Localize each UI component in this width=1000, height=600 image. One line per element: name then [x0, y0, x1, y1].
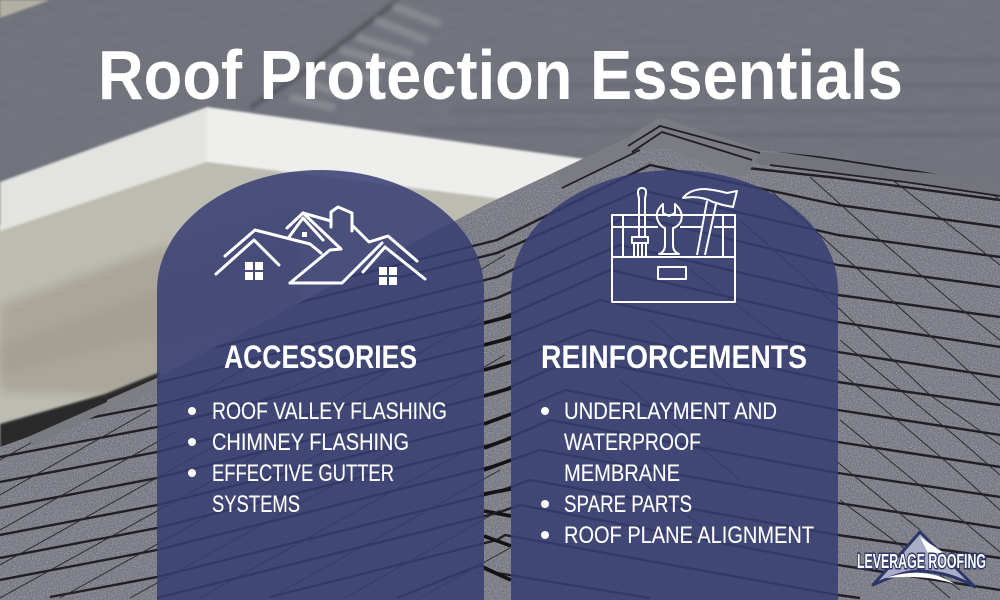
ridge cap shingles [555, 117, 1000, 196]
fascia board [0, 107, 620, 231]
list: reinforcements: WATERPROOF [564, 429, 701, 456]
list: accessories: ROOF VALLEY FLASHING [212, 398, 447, 425]
list: reinforcements: UNDERLAYMENT AND [564, 398, 777, 425]
background: blurred upper roof and fascia [0, 0, 1000, 447]
list: reinforcements: ROOF PLANE ALIGNMENT [564, 522, 814, 549]
shingle diagonal seams [0, 170, 1000, 598]
list: accessories: EFFECTIVE GUTTER [212, 460, 394, 487]
heading: accessories: ACCESSORIES [224, 339, 417, 375]
list: reinforcements [541, 398, 814, 549]
icon: houses [216, 207, 425, 285]
list: accessories: SYSTEMS [212, 491, 300, 518]
left eave shingle tabs [28, 402, 108, 446]
wall [0, 161, 500, 447]
shingle course lines [0, 165, 1000, 598]
panel background arch [157, 170, 484, 600]
list: accessories [188, 398, 447, 518]
roof-edge shadow [0, 372, 160, 450]
list: reinforcements: MEMBRANE [564, 460, 680, 487]
top-left wall corner [0, 0, 50, 18]
panel background arch [511, 170, 838, 600]
thick dark gap lines [484, 316, 511, 580]
list: reinforcements: SPARE PARTS [564, 491, 692, 518]
panel: reinforcements [511, 170, 838, 600]
heading: reinforcements: REINFORCEMENTS [541, 339, 807, 375]
logo: Leverage Roofing [857, 532, 986, 587]
icon: toolbox [612, 188, 737, 302]
title: Roof Protection Essentials [98, 36, 903, 114]
list: accessories: CHIMNEY FLASHING [212, 429, 409, 456]
panel: accessories [157, 170, 484, 600]
